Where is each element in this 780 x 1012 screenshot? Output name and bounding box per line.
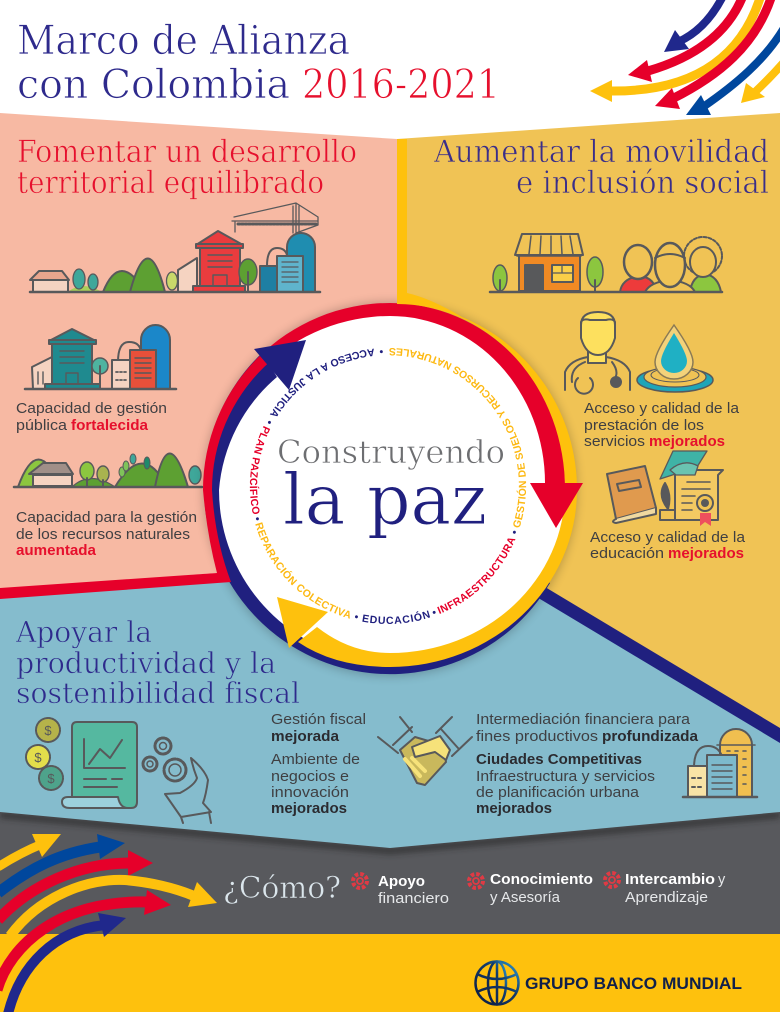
icon: hills and house: [14, 454, 202, 487]
circular text: PLAN PAZCÍFICO: [250, 426, 270, 514]
title: [17, 18, 500, 108]
ring: yellow band: [298, 139, 577, 667]
text: apoyo financiero: financiero: [378, 891, 449, 907]
text: recursos naturales: Capacidad para la gestión: [16, 510, 197, 526]
text: prestación de servicios: prestación de los: [584, 418, 704, 434]
heading: desarrollo territorial: territorial equilibrado: [17, 165, 324, 201]
heading: productividad: productividad y la: [16, 646, 276, 680]
text: intermediación y ciudades: Intermediación financiera para: [476, 712, 691, 728]
circular text: GESTIÓN DE SUELOS Y RECURSOS NATURALES: [389, 348, 526, 528]
icon: coins: [26, 718, 63, 790]
circular text: •: [355, 615, 358, 618]
text: intermediación y ciudades: fines productivos: [476, 729, 598, 745]
center title: la paz: la paz: [283, 459, 487, 541]
text: recursos naturales: aumentada: [16, 543, 97, 559]
text: apoyo financiero: [378, 874, 449, 907]
circular text: •: [268, 420, 271, 424]
text: gestión fiscal: [271, 712, 366, 817]
text: gestión fiscal: innovación: [271, 785, 349, 801]
icon: city administration: [25, 325, 176, 389]
circular text: EDUCACIÓN: [362, 610, 430, 624]
text: gestión pública: [16, 401, 167, 434]
text: recursos naturales: de los recursos naturales: [16, 527, 190, 543]
circular text: •: [432, 610, 436, 614]
heading: productividad: [15, 615, 300, 710]
icon: gear 3: [605, 873, 619, 887]
text: conocimiento y asesoría: [490, 872, 593, 906]
heading: movilidad: [433, 134, 769, 201]
panel: footer band: [0, 934, 780, 1012]
text: apoyo financiero: Apoyo: [378, 874, 425, 890]
heading: desarrollo territorial: Fomentar un desarrollo: [17, 134, 357, 170]
circular text: •: [256, 517, 259, 520]
icon: coins: $: [47, 771, 55, 786]
logo text: GRUPO BANCO MUNDIAL: [525, 974, 742, 993]
heading: productividad: sostenibilidad fiscal: [16, 676, 300, 710]
icon: book and diploma: [607, 451, 723, 526]
icon: gear 2: [469, 874, 483, 888]
text: intermediación y ciudades: [476, 712, 699, 817]
icon: gear 1: [353, 874, 367, 888]
text: recursos naturales: [16, 510, 197, 559]
heading: movilidad: e inclusión social: [516, 165, 769, 201]
panel: desarrollo territorial: [0, 113, 397, 590]
panel shadow: [0, 815, 780, 851]
ring: red band: [0, 303, 565, 599]
circular text: REPARACIÓN COLECTIVA: [255, 522, 350, 619]
text: gestión fiscal: mejorados: [271, 801, 347, 817]
text: educación: [590, 530, 746, 562]
arrows: bottom left: [0, 834, 217, 1012]
icon: shop and people: [490, 234, 722, 292]
panel: productividad y sostenibilidad: [0, 575, 780, 848]
arrowhead: yellow: [277, 597, 328, 648]
panel: cómo (dark band): [0, 800, 780, 934]
arrowhead: red: [530, 483, 583, 528]
arrows: top right: [590, 0, 780, 115]
text: conocimiento y asesoría: y Asesoría: [490, 890, 561, 906]
panel: movilidad e inclusión: [397, 113, 780, 745]
text: intercambio y aprendizaje: Intercambio: [625, 872, 715, 888]
heading: productividad: Apoyar la: [15, 615, 152, 649]
text: prestación de servicios: mejorados: [649, 434, 725, 450]
title: 2016-2021: [302, 62, 500, 108]
text: intercambio y aprendizaje: [625, 872, 726, 906]
icon: skyline with crane: [30, 203, 320, 292]
text: gestión fiscal: mejorada: [271, 729, 340, 745]
text: intermediación y ciudades: Infraestructura y servicios: [476, 769, 655, 785]
icon: water drop: [637, 325, 713, 392]
circular text: [250, 348, 526, 624]
text: educación: Acceso y calidad de la: [590, 530, 746, 546]
text: gestión pública: pública: [16, 418, 68, 434]
icon: gears and hand: [143, 738, 211, 823]
circular text: INFRAESTRUCTURA: [437, 538, 516, 614]
circular text: •: [512, 530, 516, 534]
ring: navy band: [204, 353, 780, 743]
text: intermediación y ciudades: de planificación urbana: [476, 785, 640, 801]
text: intercambio y aprendizaje: y: [718, 872, 726, 888]
text: prestación de servicios: servicios: [584, 434, 645, 450]
center title: construyendo: Construyendo: [277, 433, 505, 471]
icon: city buildings: [683, 729, 757, 797]
text: prestación de servicios: Acceso y calidad de la: [584, 401, 740, 417]
text: conocimiento y asesoría: Conocimiento: [490, 872, 593, 888]
icon: coins: $: [34, 750, 42, 765]
text: gestión pública: fortalecida: [71, 418, 149, 434]
circular text: ACCESO A LA JUSTICIA: [270, 348, 374, 416]
icon: handshake: [378, 717, 472, 785]
text: educación: mejorados: [668, 546, 744, 562]
text: gestión fiscal: Ambiente de: [271, 752, 360, 768]
heading: desarrollo territorial: [17, 134, 357, 201]
icon: world bank globe: [476, 961, 518, 1005]
text: gestión pública: Capacidad de gestión: [16, 401, 167, 417]
icon: coins: $: [44, 723, 52, 738]
title: con Colombia: [17, 62, 290, 108]
circular text: •: [380, 350, 383, 354]
text: intermediación y ciudades: Ciudades Competitivas: [476, 752, 642, 768]
text: educación: educación: [590, 546, 664, 562]
text: intermediación y ciudades: profundizada: [602, 729, 699, 745]
text: intermediación y ciudades: mejorados: [476, 801, 552, 817]
text: intercambio y aprendizaje: Aprendizaje: [625, 890, 708, 906]
text: gestión fiscal: negocios e: [271, 769, 349, 785]
central cycle: construyendo la paz: [0, 139, 780, 743]
text: gestión fiscal: Gestión fiscal: [271, 712, 366, 728]
title: Marco de Alianza: [17, 18, 350, 64]
arrowhead: navy: [254, 340, 306, 390]
text: ¿Cómo?: ¿Cómo?: [223, 871, 341, 906]
text: prestación de servicios: [584, 401, 740, 450]
icon: doctor: [565, 312, 630, 394]
icon: financial report: [62, 722, 137, 808]
